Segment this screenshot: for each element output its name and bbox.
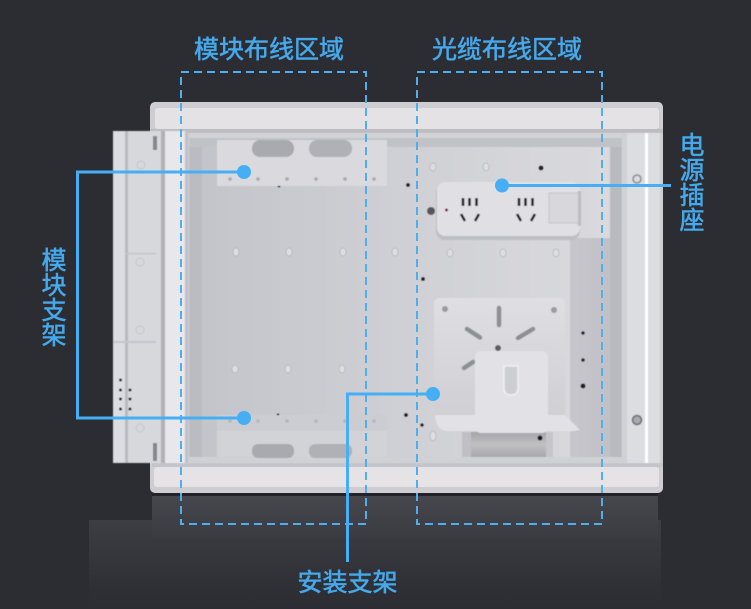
label: power socket <box>679 132 705 235</box>
heading: fiber wiring zone: 光缆布线区域 <box>432 36 582 64</box>
bottom module bracket <box>217 415 387 458</box>
power socket strip <box>436 182 581 240</box>
door panel <box>113 131 188 463</box>
installation bracket <box>434 298 580 457</box>
right frame post <box>622 133 660 463</box>
background reflection <box>89 493 661 609</box>
label: module bracket: 模 <box>41 247 67 275</box>
keyhole mounting points <box>232 163 559 441</box>
screw holes <box>276 166 586 427</box>
label: module bracket: 支 <box>41 297 67 325</box>
label: module bracket: 架 <box>41 322 67 350</box>
label: power socket: 电 <box>679 132 705 160</box>
cabinet frame <box>150 102 663 493</box>
callout: installation bracket leader <box>348 387 440 562</box>
callout: power socket leader <box>495 178 671 192</box>
dashed zone: module wiring <box>181 72 366 524</box>
dashed zone: fiber wiring <box>417 72 602 524</box>
label: module bracket: 块 <box>41 272 67 300</box>
label: power socket: 座 <box>679 207 705 235</box>
label: module bracket <box>41 247 67 350</box>
label: power socket: 源 <box>679 157 705 185</box>
heading: module wiring zone: 模块布线区域 <box>194 36 344 64</box>
top module bracket <box>217 140 387 186</box>
callout: module bracket leader <box>78 165 251 425</box>
label: installation bracket: 安装支架 <box>297 569 398 597</box>
label: power socket: 插 <box>679 182 705 210</box>
cabinet interior <box>186 133 627 463</box>
